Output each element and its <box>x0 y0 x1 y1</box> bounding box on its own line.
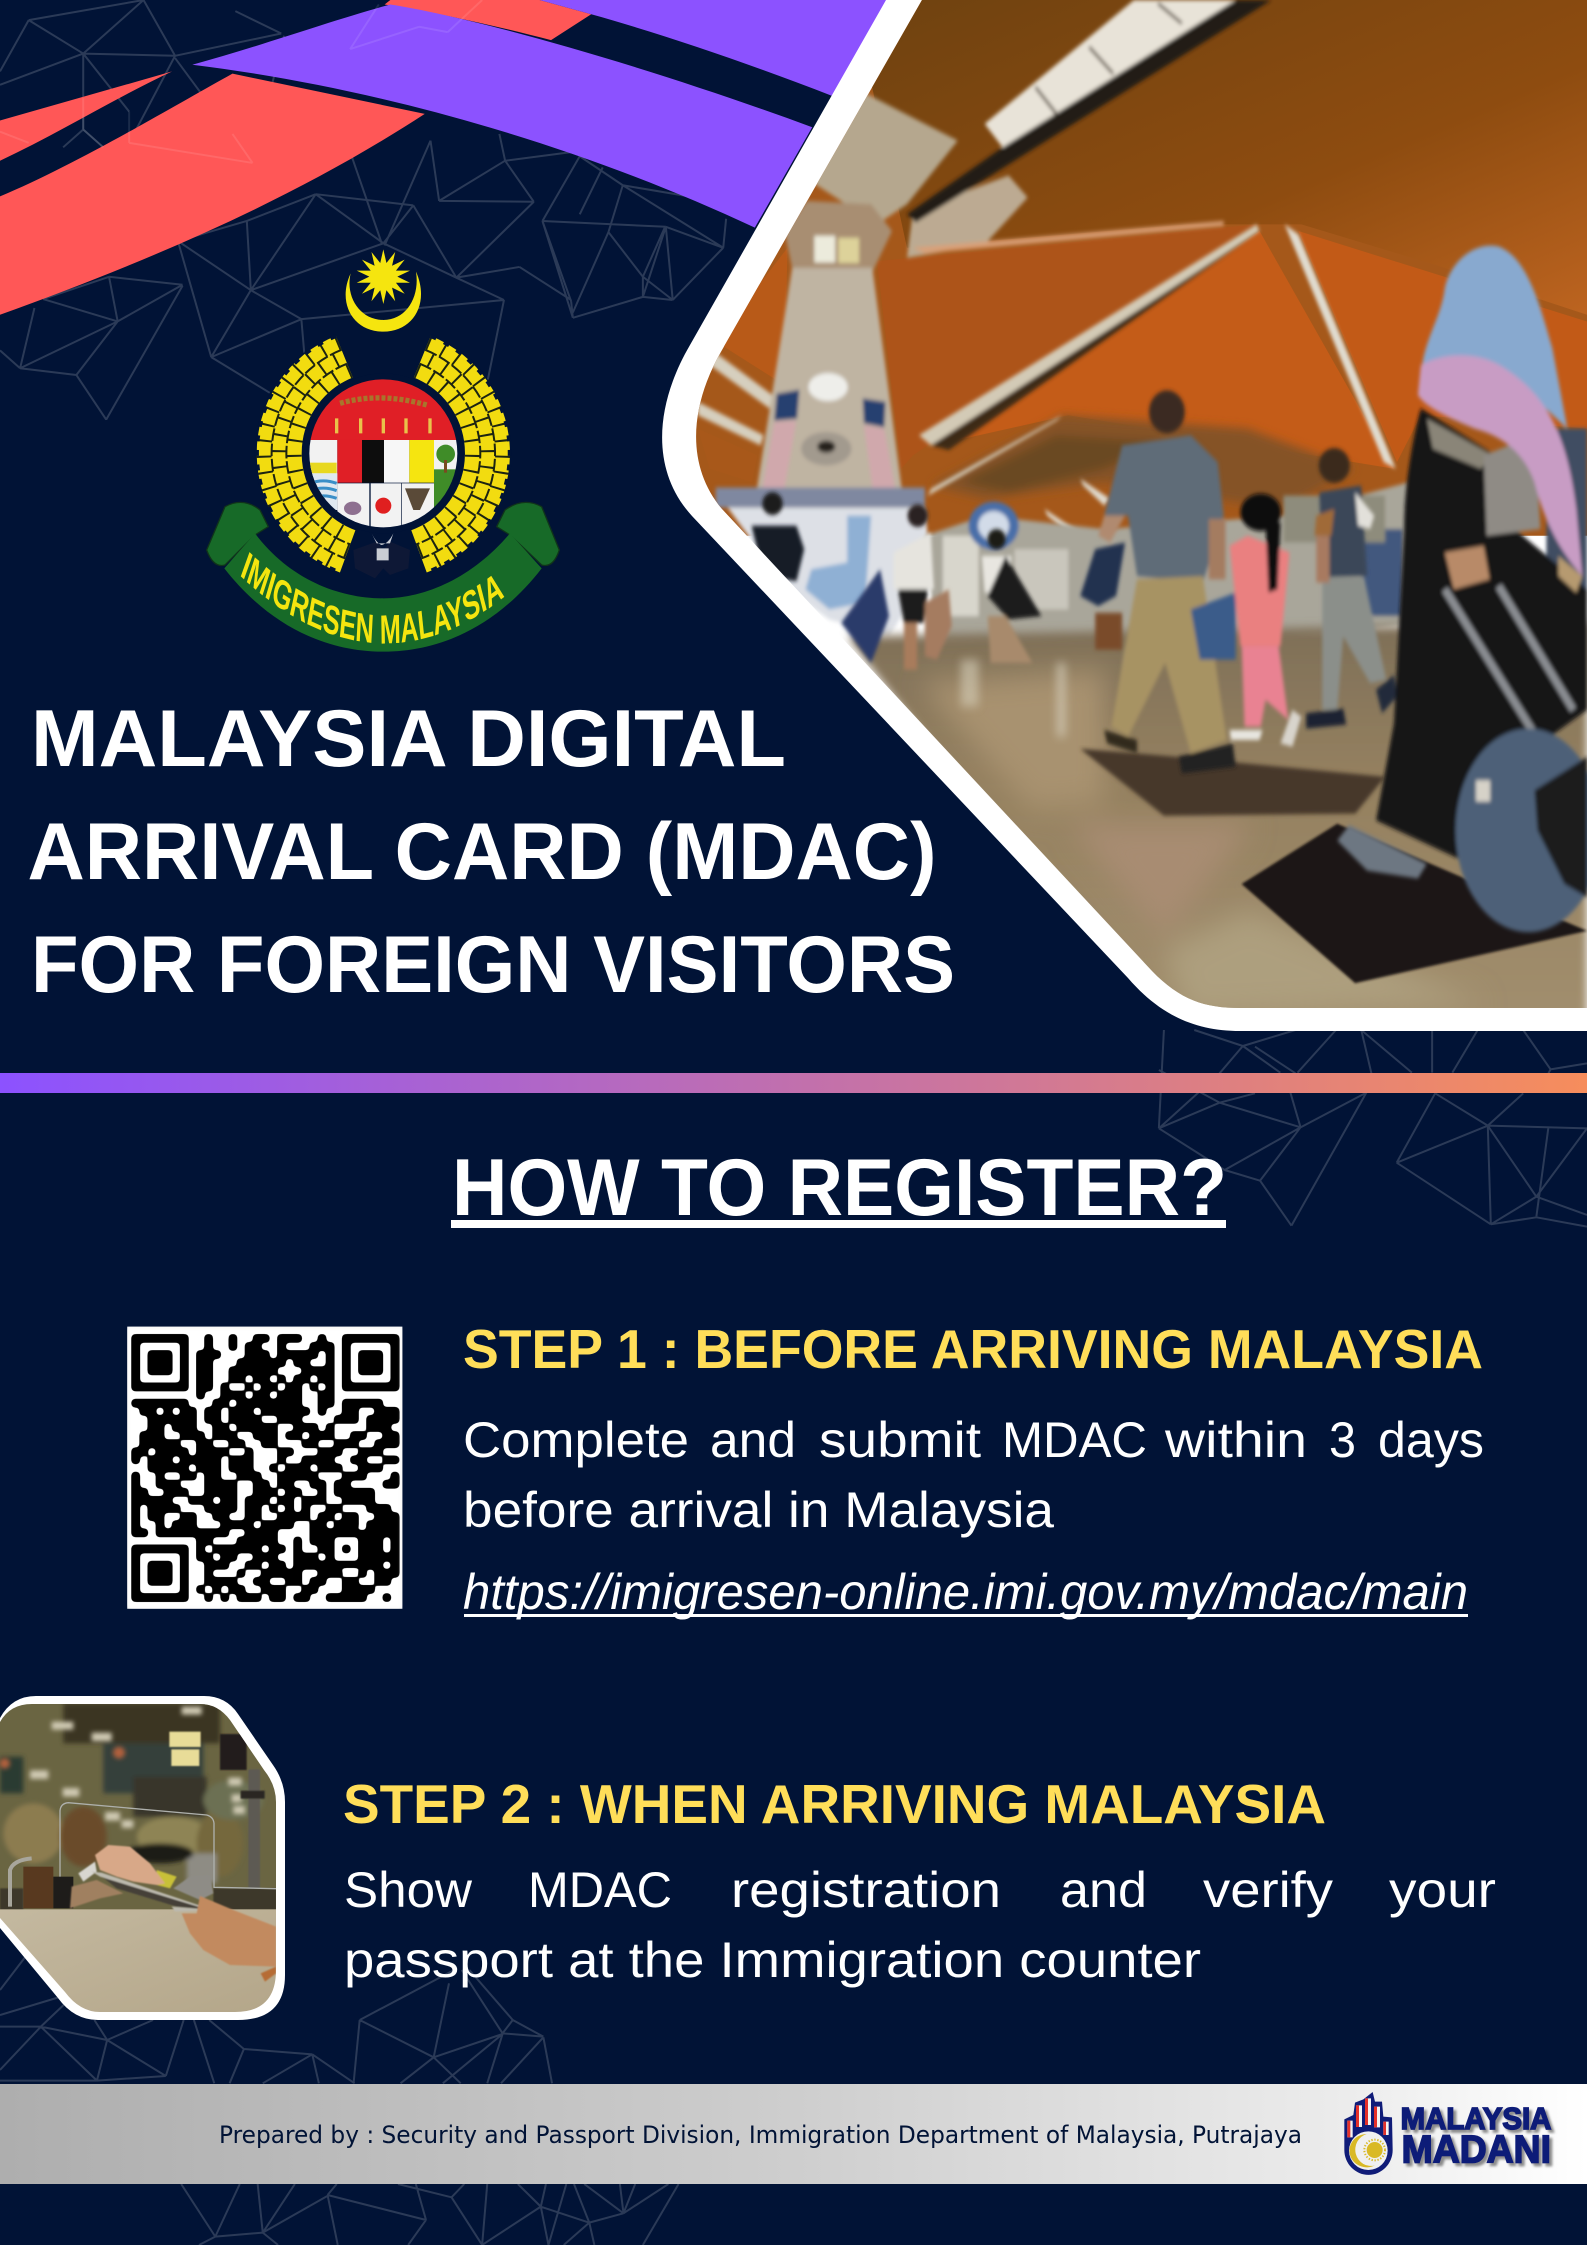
photo frame: immigration counter <box>0 1696 287 2020</box>
title: FOR FOREIGN VISITORS <box>31 920 955 1010</box>
step 2 body: registration <box>731 1862 1001 1918</box>
logo wordmark: MALAYSIA <box>1401 2102 1551 2136</box>
icon: paddy wreath <box>257 336 510 572</box>
step 1 heading: STEP 1 : BEFORE ARRIVING MALAYSIA <box>463 1318 1483 1380</box>
QR code <box>127 1327 402 1609</box>
step 1 body <box>463 1412 1484 1538</box>
ribbon banner <box>206 502 560 652</box>
ribbon banner: IMIGRESEN MALAYSIA <box>240 552 504 644</box>
small figures <box>762 492 783 515</box>
ribbons: coral and purple swooshes <box>0 0 895 315</box>
man <box>1149 390 1185 433</box>
footer band <box>0 2084 1587 2184</box>
step 1 body: within <box>1164 1412 1307 1468</box>
emblem: Imigresen Malaysia crest <box>206 250 560 652</box>
step 2 body: MDAC <box>528 1862 672 1918</box>
title: ARRIVAL CARD (MDAC) <box>28 807 936 897</box>
icon: crescent <box>346 272 421 332</box>
suitcase <box>1191 593 1236 660</box>
step 2 body: Show <box>344 1862 473 1918</box>
logo: Malaysia Madani <box>1344 2092 1551 2175</box>
info board <box>716 488 925 508</box>
right edge background <box>1546 429 1587 603</box>
logo wordmark: MADANI <box>1402 2129 1551 2172</box>
title <box>28 694 955 1010</box>
step 2 body: and <box>1060 1862 1147 1918</box>
floor <box>847 623 1587 1050</box>
step 1 body: and <box>710 1412 796 1468</box>
step 1 <box>463 1318 1484 1620</box>
step 1 body: before arrival in Malaysia <box>463 1482 1054 1538</box>
step 2 heading: STEP 2 : WHEN ARRIVING MALAYSIA <box>343 1773 1326 1835</box>
hijab <box>1422 246 1567 429</box>
step 2 <box>343 1773 1496 1988</box>
step 2 body: passport at the Immigration counter <box>344 1932 1201 1988</box>
icon: hand emblem <box>1344 2092 1393 2175</box>
woman: robe <box>1376 409 1587 861</box>
gradient divider bar <box>0 1073 1587 1093</box>
background concourse <box>925 482 1421 643</box>
step 1 link: https://imigresen-online.imi.gov.my/mdac/main <box>463 1564 1468 1620</box>
icon: sun <box>357 249 410 304</box>
step 1 body: MDAC <box>1002 1412 1147 1468</box>
girl <box>1240 494 1281 531</box>
logo wordmark <box>1401 2102 1551 2172</box>
step 1 body: 3 <box>1329 1412 1356 1468</box>
shoe <box>1337 825 1427 879</box>
third walker <box>1319 448 1350 483</box>
icon: bow <box>353 533 410 578</box>
step 1 body: Complete <box>463 1412 689 1468</box>
heading: how to register: HOW TO REGISTER? <box>452 1143 1227 1233</box>
step 2 body: your <box>1389 1862 1496 1918</box>
step 1 body: days <box>1378 1412 1484 1468</box>
step 2 body <box>344 1862 1496 1988</box>
column <box>784 201 892 275</box>
counter <box>0 1909 287 2019</box>
step 1 body: submit <box>819 1412 981 1468</box>
hand and luggage <box>1445 546 1490 589</box>
footer credit: Prepared by : Security and Passport Division, Immigration Department of Malaysia, Putrajaya <box>219 2121 1302 2149</box>
step 2 body: verify <box>1203 1862 1333 1918</box>
title: MALAYSIA DIGITAL <box>31 694 786 784</box>
photo frame: KLIA terminal <box>650 0 1587 1050</box>
shield <box>309 379 458 528</box>
